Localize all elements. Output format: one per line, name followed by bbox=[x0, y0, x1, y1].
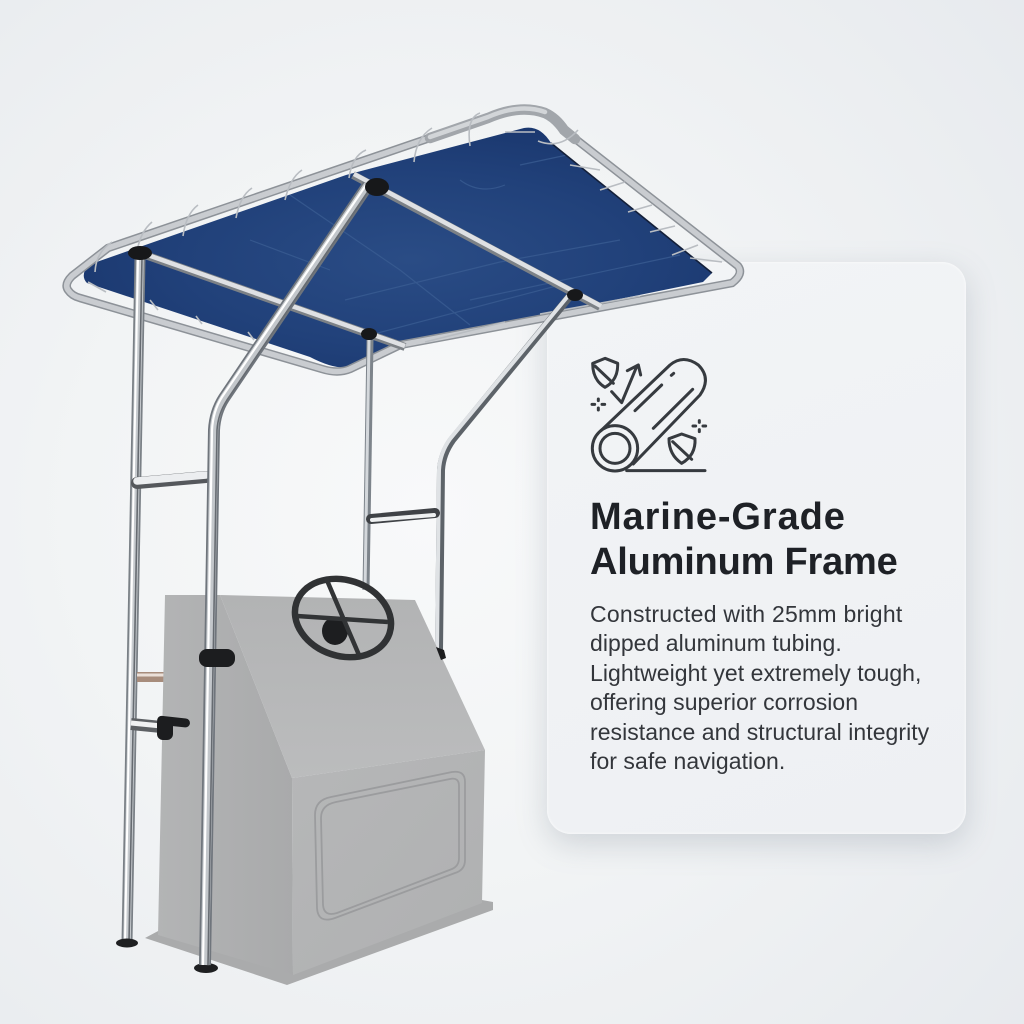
heading: Marine-Grade bbox=[590, 496, 846, 538]
lacing bbox=[88, 113, 722, 342]
description text: resistance and structural integrity bbox=[590, 718, 929, 744]
thick frame corner bbox=[430, 109, 575, 139]
canopy crossbars bbox=[145, 255, 405, 347]
heading: Aluminum Frame bbox=[590, 541, 898, 583]
description text: offering superior corrosion bbox=[590, 689, 858, 715]
rear crossbars bbox=[131, 475, 435, 731]
canopy fabric bbox=[84, 128, 712, 368]
fabric right edge shadow bbox=[551, 143, 712, 273]
console side bbox=[158, 595, 293, 975]
description text bbox=[590, 600, 929, 774]
console base bbox=[145, 900, 493, 985]
description text: dipped aluminum tubing. bbox=[590, 630, 842, 656]
console slope bbox=[220, 595, 485, 778]
hub bbox=[322, 617, 348, 645]
clamps bbox=[157, 647, 446, 740]
foot left bbox=[116, 938, 138, 948]
foot centre bbox=[194, 963, 218, 973]
description text: for safe navigation. bbox=[590, 748, 785, 774]
canopy bbox=[67, 108, 740, 371]
console panel inset bbox=[315, 772, 465, 920]
main post bbox=[203, 185, 371, 965]
panel: info card bbox=[547, 262, 966, 834]
steering wheel bbox=[285, 567, 401, 669]
description text: Lightweight yet extremely tough, bbox=[590, 660, 921, 686]
rear posts bbox=[125, 258, 570, 942]
heading bbox=[590, 496, 898, 583]
fabric creases bbox=[250, 148, 680, 335]
console front bbox=[292, 750, 485, 975]
product illustration: T-top console bbox=[62, 104, 744, 985]
description text: Constructed with 25mm bright bbox=[590, 600, 903, 626]
mounting brackets bbox=[128, 178, 583, 340]
outer frame bbox=[67, 108, 740, 371]
console bbox=[145, 595, 493, 985]
